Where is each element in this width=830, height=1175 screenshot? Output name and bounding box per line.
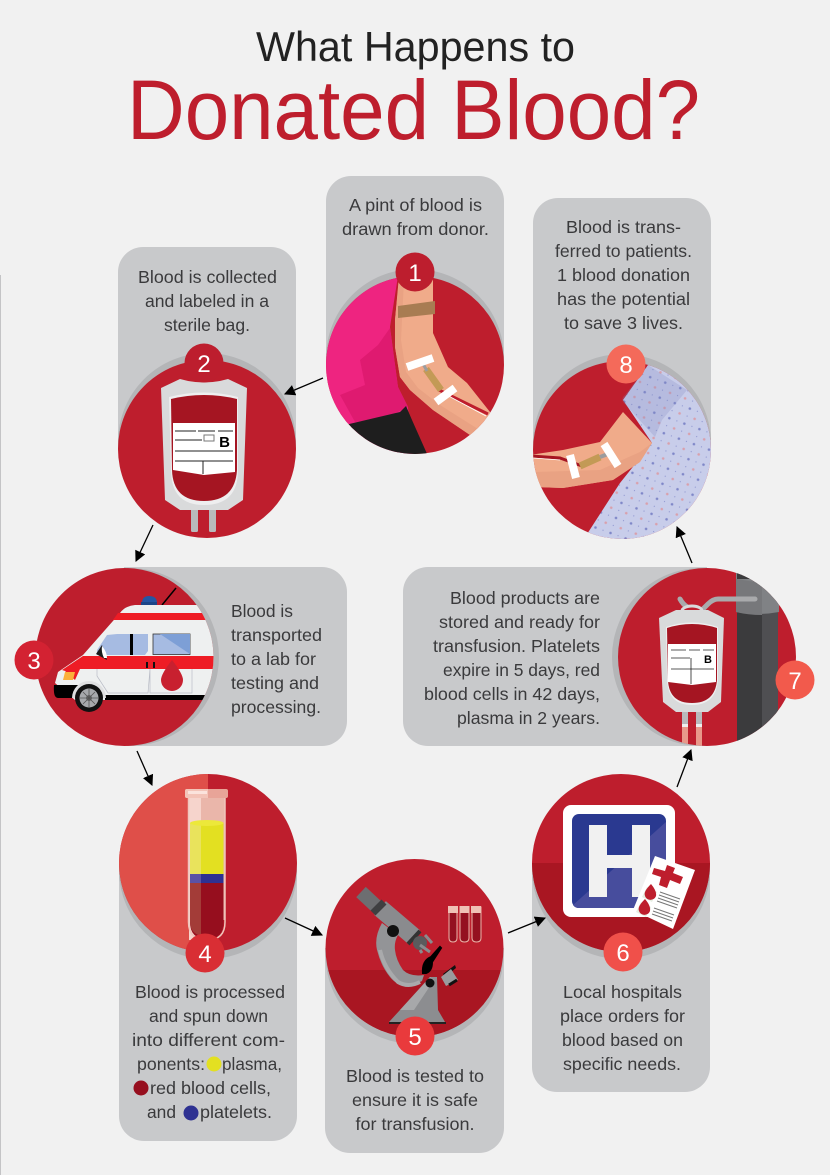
badge 7 bbox=[776, 660, 814, 700]
arrow: 3 to 4 bbox=[137, 751, 152, 785]
icon: labeled blood bag: B bbox=[219, 434, 230, 451]
caption: step 4 with component legend: plasma, bbox=[222, 1054, 282, 1074]
badge 5: 5 bbox=[408, 1024, 422, 1051]
caption: step 2: and labeled in a bbox=[145, 291, 269, 311]
caption: step 7: expire in 5 days, red bbox=[443, 660, 600, 680]
caption: step 6: specific needs. bbox=[563, 1054, 681, 1074]
caption: step 3: processing. bbox=[231, 697, 321, 717]
badge 8: 8 bbox=[619, 352, 633, 379]
panel: step 2 collected and labeled bbox=[118, 247, 296, 538]
illustration: centrifuged test tube bbox=[119, 774, 228, 950]
caption: step 6: blood based on bbox=[562, 1030, 683, 1050]
illustration: microscope and test tubes bbox=[320, 892, 510, 1040]
caption: step 4 with component legend: red blood cells, bbox=[150, 1078, 271, 1098]
title bbox=[127, 23, 700, 157]
panel: step 3 transport bbox=[36, 567, 347, 746]
caption: step 5 bbox=[346, 1066, 484, 1134]
caption: step 8: to save 3 lives. bbox=[564, 313, 683, 333]
caption: step 7: plasma in 2 years. bbox=[457, 708, 600, 728]
badge 5 bbox=[396, 1016, 434, 1056]
caption: step 4 with component legend: Blood is processed bbox=[135, 982, 285, 1002]
badge 1: 1 bbox=[408, 260, 422, 287]
caption: step 5: for transfusion. bbox=[356, 1114, 474, 1134]
arrow: 4 to 5 bbox=[285, 918, 322, 935]
caption: step 4 with component legend: and spun down bbox=[149, 1006, 268, 1026]
caption: step 4 with component legend bbox=[132, 982, 285, 1122]
caption: step 7: blood cells in 42 days, bbox=[424, 684, 600, 704]
icon: blood drop on door bbox=[161, 660, 183, 691]
panel: step 5 tested bbox=[320, 859, 510, 1153]
badge 6 bbox=[604, 932, 642, 972]
illustration: hospital sign and order form bbox=[532, 805, 710, 950]
caption: step 2: sterile bag. bbox=[164, 315, 250, 335]
badge 6: 6 bbox=[616, 940, 630, 967]
badge 8 bbox=[606, 344, 646, 384]
caption: step 1: A pint of blood is bbox=[349, 195, 482, 215]
badge 4: 4 bbox=[198, 941, 212, 968]
panel: step 8 transfused to patients bbox=[530, 198, 720, 545]
caption: step 3: Blood is bbox=[231, 601, 293, 621]
caption: step 4 with component legend: platelets. bbox=[200, 1102, 272, 1122]
caption: step 8 bbox=[555, 217, 692, 333]
caption: step 4 with component legend: into different com- bbox=[132, 1030, 285, 1050]
panel: step 6 hospitals bbox=[525, 774, 715, 1092]
caption: step 8: Blood is trans- bbox=[566, 217, 681, 237]
badge 2 bbox=[184, 344, 224, 382]
illustration: patient arm and gown bbox=[530, 365, 720, 545]
caption: step 3 bbox=[231, 601, 322, 717]
arrow: 7 to 8 bbox=[677, 527, 692, 563]
title: Donated Blood? bbox=[127, 63, 700, 157]
caption: step 3: testing and bbox=[231, 673, 319, 693]
arrow: 1 to 2 bbox=[285, 378, 323, 394]
caption: step 6 bbox=[560, 982, 685, 1074]
badge 1 bbox=[396, 252, 434, 292]
caption: step 8: ferred to patients. bbox=[555, 241, 692, 261]
caption: step 6: Local hospitals bbox=[563, 982, 682, 1002]
arrow: 6 to 7 bbox=[677, 750, 691, 787]
icon: order form with drops bbox=[633, 856, 695, 929]
caption: step 6: place orders for bbox=[560, 1006, 685, 1026]
panel: step 1 pint drawn bbox=[320, 176, 504, 460]
badge 3: 3 bbox=[27, 648, 41, 675]
illustration: stored bag on stand bbox=[659, 565, 779, 750]
caption: step 3: transported bbox=[231, 625, 322, 645]
illustration: stored bag on stand: B bbox=[704, 654, 712, 666]
caption: step 4 with component legend: and bbox=[147, 1102, 176, 1122]
caption: step 1 bbox=[342, 195, 489, 239]
caption: step 7: transfusion. Platelets bbox=[433, 636, 600, 656]
caption: step 2 bbox=[138, 267, 277, 335]
panel: step 7 stored bbox=[403, 565, 796, 750]
caption: step 5: ensure it is safe bbox=[352, 1090, 478, 1110]
caption: step 3: to a lab for bbox=[231, 649, 316, 669]
arrow: 2 to 3 bbox=[136, 525, 153, 561]
caption: step 7 bbox=[424, 588, 600, 728]
arrow: 5 to 6 bbox=[508, 918, 545, 933]
caption: step 8: has the potential bbox=[557, 289, 690, 309]
caption: step 1: drawn from donor. bbox=[342, 219, 489, 239]
panel: step 4 processed bbox=[115, 770, 297, 1141]
badge 2: 2 bbox=[197, 351, 211, 378]
caption: step 4 with component legend: ponents: bbox=[137, 1054, 205, 1074]
illustration: donor arm bbox=[326, 278, 490, 454]
caption: step 5: Blood is tested to bbox=[346, 1066, 484, 1086]
caption: step 8: 1 blood donation bbox=[557, 265, 690, 285]
title: What Happens to bbox=[256, 23, 575, 70]
caption: step 2: Blood is collected bbox=[138, 267, 277, 287]
caption: step 7: stored and ready for bbox=[439, 612, 600, 632]
caption: step 7: Blood products are bbox=[450, 588, 600, 608]
badge 7: 7 bbox=[788, 668, 802, 695]
illustration: ambulance bbox=[54, 588, 220, 712]
badge 3 bbox=[14, 640, 54, 680]
badge 4 bbox=[186, 934, 224, 972]
icon: labeled blood bag bbox=[161, 379, 247, 532]
